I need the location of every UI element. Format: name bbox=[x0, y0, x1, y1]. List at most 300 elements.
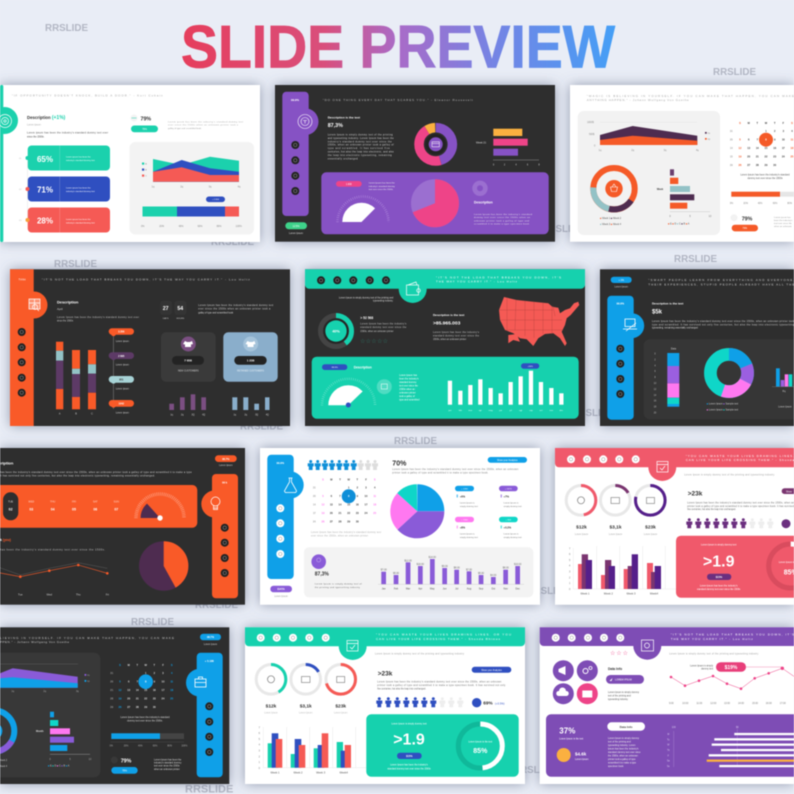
bar chart: Apr bbox=[418, 588, 422, 591]
calendar: 30 bbox=[153, 705, 156, 709]
body text: and typesetting industry. Lorem Ipsum has been the bbox=[328, 137, 394, 140]
stat: 23k: Show your Analytics bbox=[481, 669, 503, 672]
calendar: 9 bbox=[357, 494, 359, 498]
callouts: simply dummy text bbox=[460, 505, 478, 508]
line chart: Fri bbox=[106, 592, 109, 596]
line chart: Thu bbox=[76, 592, 81, 596]
days: 05 bbox=[72, 508, 76, 512]
calendar: 30 bbox=[356, 520, 359, 524]
timeline dots: 02 bbox=[19, 189, 22, 191]
horizontal bar chart: W bbox=[667, 745, 670, 747]
calendar caption: Lorem Ipsum has been the industry's standard bbox=[120, 716, 170, 719]
calendar: F bbox=[783, 121, 785, 125]
calendar: 22 bbox=[765, 154, 768, 158]
calendar: 14 bbox=[136, 688, 139, 692]
calendar: 2 bbox=[154, 671, 156, 675]
calendar: 27 bbox=[747, 163, 751, 167]
calendar: 28 bbox=[756, 163, 759, 167]
79% stat: when an unknown bbox=[774, 226, 792, 228]
body text: essentially unchanged bbox=[328, 157, 358, 160]
calendar: 27 bbox=[330, 520, 333, 524]
stat: 85.965.003: standard dummy text ever since the bbox=[433, 334, 480, 338]
pill: 98.7% bbox=[222, 458, 230, 461]
calendar: 23 bbox=[356, 511, 359, 515]
progress bar: 80% bbox=[787, 203, 792, 205]
sidebar: 99.9% bbox=[291, 98, 299, 102]
sidebar bbox=[282, 92, 318, 216]
calendar: M bbox=[748, 121, 750, 125]
stat: 69% bbox=[472, 698, 505, 707]
slide 5: dark with teal bbox=[305, 269, 585, 426]
panel: teal stat bbox=[366, 714, 519, 777]
horizontal bar chart bbox=[657, 169, 712, 225]
watermarks: RRSLIDE bbox=[195, 600, 238, 611]
stacked bar: 6 bbox=[654, 371, 656, 373]
slide 9: white with coral bbox=[555, 448, 794, 605]
panel: charts bbox=[130, 142, 254, 234]
calendar: 20 bbox=[747, 154, 751, 158]
horizontal bars: ■ E ■ D ■ C ■ B ■ A bbox=[48, 764, 70, 768]
area chart: 3q bbox=[664, 149, 667, 152]
timeline pills: Lorem ipsum bbox=[116, 387, 129, 390]
pill: + 2.560 bbox=[212, 199, 220, 201]
slide 3: white with orange bbox=[570, 85, 794, 242]
bar chart: jun bbox=[498, 410, 503, 412]
progress bar: 0% bbox=[110, 746, 113, 748]
stacked bar: 2 bbox=[654, 359, 656, 361]
pill bbox=[215, 455, 237, 467]
calendar: 17 bbox=[313, 511, 316, 515]
stat: 85.965.003 bbox=[433, 313, 480, 341]
ring stats: $12k bbox=[576, 524, 587, 530]
days and hours: HOURS bbox=[176, 318, 185, 320]
grouped bar chart: 3 bbox=[259, 750, 261, 752]
bar chart: $10.00 bbox=[514, 563, 522, 566]
stacked bar bbox=[141, 206, 243, 228]
intro text: Lorem Ipsum is simply dummy text of the printing and typesetting industry bbox=[375, 652, 465, 656]
ring stats: Lorem Ipsum bbox=[609, 533, 622, 536]
pill bbox=[200, 634, 221, 646]
stacked bar: 0 bbox=[654, 354, 656, 356]
ring: 85% bbox=[769, 544, 794, 588]
green pill: 12.5% bbox=[293, 225, 300, 228]
grouped bar chart bbox=[259, 726, 386, 774]
heading 70% bbox=[392, 460, 519, 474]
description: Lorem Ipsum has been the industry's standard dummy text ever bbox=[57, 316, 139, 319]
grouped bar chart: 1 bbox=[569, 582, 571, 585]
donut legend: ■ Week 1 ■ Week 2 bbox=[600, 217, 622, 220]
calendar: T bbox=[339, 478, 341, 482]
stacked bar: 0% bbox=[141, 225, 145, 228]
quote bbox=[376, 633, 511, 641]
sidebar bbox=[267, 455, 304, 579]
callouts: Lorem Ipsum is bbox=[504, 502, 519, 504]
calendar: 26 bbox=[119, 705, 122, 709]
stat: 52 568: Lorem Ipsum has been the industry's bbox=[360, 322, 407, 326]
stat: 23k: five centuries, but also the leap into unchanged. bbox=[687, 508, 736, 511]
body text: industry's standard dummy text ever since the bbox=[328, 140, 392, 143]
body text: type and scrambled. It has survived five bbox=[328, 147, 390, 150]
area chart: 2q bbox=[43, 690, 47, 693]
big number: Lorem Ipsum has been the industry's bbox=[700, 584, 738, 588]
stat: 85.965.003: 1500s, when an unknown printer bbox=[433, 338, 466, 341]
heading: Description is the text bbox=[328, 116, 360, 120]
stat: 23k: Show bbox=[786, 491, 792, 493]
legend: T1 bbox=[708, 133, 711, 135]
pill: top bar: +50% bbox=[528, 366, 533, 368]
calendar bbox=[730, 121, 794, 167]
grouped bar chart: 2 bbox=[259, 755, 261, 758]
icon: report bbox=[29, 299, 40, 311]
bar chart: $7.00 bbox=[381, 569, 387, 572]
icon: laptop bbox=[623, 319, 637, 331]
calendar: 6 bbox=[128, 680, 130, 684]
calendar: 14 bbox=[313, 502, 316, 506]
bar chart: $4.00 bbox=[490, 574, 497, 577]
79% stat: Lorem ipsum has bbox=[774, 216, 792, 219]
calendar caption: dummy text ever since the 1500s bbox=[747, 177, 783, 180]
small bars: Rq bbox=[783, 391, 786, 393]
sidebar: 99 k bbox=[222, 480, 228, 484]
card: 65%: industry's standard dummy text bbox=[66, 159, 95, 162]
big number: >1.9 bbox=[393, 732, 425, 748]
days: FRI bbox=[72, 500, 76, 504]
calendar: 21 bbox=[110, 688, 114, 692]
progress bar: 80% bbox=[167, 746, 172, 748]
panel: revenue bars bbox=[304, 547, 533, 597]
bar chart: Aug bbox=[467, 588, 472, 591]
line chart: 11:00 bbox=[696, 702, 703, 705]
pill and heading: Description bbox=[354, 366, 372, 370]
callouts: Lorem Ipsum is bbox=[460, 502, 476, 504]
description: Description is the text bbox=[652, 302, 683, 306]
calendar: 8 bbox=[145, 680, 147, 684]
card: 71%: 71% bbox=[37, 186, 53, 194]
big number: Lorem Ipsum has been the industry's bbox=[390, 764, 429, 767]
header bbox=[245, 627, 525, 660]
bar chart: 2 bbox=[504, 164, 506, 166]
bar chart: 4 bbox=[515, 164, 517, 166]
horizontal bar chart: M bbox=[667, 734, 669, 736]
text block: text ever since the bbox=[399, 384, 419, 388]
subheading: k (you) bbox=[0, 538, 11, 542]
line chart: 14:00 bbox=[738, 702, 745, 705]
heading bbox=[328, 116, 360, 129]
calendar: 22 bbox=[347, 511, 351, 515]
description text: Lorem ipsum bbox=[27, 124, 41, 126]
quote bbox=[436, 276, 561, 284]
horizontal bars bbox=[36, 712, 92, 768]
bar chart: May bbox=[430, 588, 435, 591]
description: Description bbox=[474, 200, 493, 204]
calendar: 31 bbox=[730, 129, 733, 133]
pie chart bbox=[404, 498, 431, 525]
bar chart: Dec bbox=[515, 588, 521, 591]
pill: show analytics: Show your Analytics bbox=[497, 459, 518, 462]
heading 70%: Lorem Ipsum has been the industry's standard dummy text ever since the 1500s, when an unknown bbox=[392, 468, 519, 471]
stacked bar: 100% bbox=[236, 225, 243, 228]
gauge bbox=[322, 379, 375, 415]
text block: 1500s when an bbox=[399, 389, 416, 391]
area chart: 0 bbox=[594, 144, 596, 148]
legend bbox=[84, 674, 90, 683]
calendar: 28 bbox=[339, 520, 342, 524]
79% stat: 79% bbox=[140, 117, 151, 123]
big number: Lorem Ipsum is simply dummy text bbox=[391, 722, 427, 726]
intro text: Lorem Ipsum is simply dummy text of the printing and typesetting industry bbox=[669, 652, 759, 656]
ring: 85%: 85% bbox=[473, 748, 488, 755]
panel: coral stat bbox=[676, 536, 794, 598]
area chart bbox=[152, 157, 241, 189]
text block bbox=[399, 374, 420, 402]
small bars: blue: 1q bbox=[234, 414, 237, 416]
intro text bbox=[339, 296, 394, 303]
watermarks: RRSLIDE bbox=[713, 67, 756, 78]
stat: Lorem Ipsum is simply dummy text of bbox=[315, 582, 362, 586]
calendar: 1 bbox=[765, 129, 767, 133]
bar chart: feb bbox=[459, 410, 463, 412]
card: new customers: NEW CUSTOMERS bbox=[178, 370, 199, 372]
grouped bar chart: Week 1 bbox=[270, 770, 280, 774]
sidebar bbox=[201, 474, 238, 598]
grouped bar chart: 0 bbox=[259, 767, 261, 770]
card: retained customers: 1 238 bbox=[247, 359, 255, 363]
small bars: blue: 3Q bbox=[255, 414, 258, 416]
panel: charts bbox=[0, 653, 100, 777]
panel: date strip bbox=[0, 485, 197, 528]
progress bar: 20% bbox=[124, 746, 128, 748]
calendar: 8 bbox=[348, 494, 350, 498]
card: 71%: industry's standard dummy text bbox=[66, 190, 95, 193]
bar chart: Oct bbox=[491, 588, 496, 591]
body text: It has survived not only five centuries, but also the leap into electronic typesetting, remaining essentially unchanged. bbox=[0, 475, 155, 478]
calendar: 1 bbox=[348, 486, 350, 490]
calendar: 17 bbox=[365, 502, 368, 506]
watermarks: RRSLIDE bbox=[674, 254, 717, 265]
description: April bbox=[57, 307, 63, 311]
calendar: 20 bbox=[730, 138, 733, 142]
watermarks: RRSLIDE bbox=[131, 617, 174, 628]
data info: LOREM IPSUM bbox=[615, 678, 632, 681]
callouts bbox=[455, 486, 522, 539]
stat: 23k bbox=[687, 488, 794, 511]
area chart: 1q bbox=[152, 186, 155, 189]
callouts: +6% bbox=[460, 494, 466, 498]
small bars: purple bbox=[169, 394, 206, 416]
header bbox=[555, 448, 794, 481]
calendar: W bbox=[347, 478, 350, 482]
pill: show analytics bbox=[488, 457, 527, 463]
grouped bar chart: 3 bbox=[569, 570, 571, 574]
slide 1: white with teal, blue and red cards bbox=[0, 85, 260, 242]
text block: typesetting industry. Lorem bbox=[608, 744, 635, 747]
watermarks: RRSLIDE bbox=[513, 765, 556, 776]
grouped bar chart: 5 bbox=[569, 559, 571, 562]
pill: Lorem Ipsum bbox=[614, 286, 628, 288]
calendar: S bbox=[322, 478, 324, 482]
horizontal bars: Month bbox=[36, 730, 44, 733]
grouped bar chart: Week 2 bbox=[293, 770, 303, 774]
ring stats: Lorem Ipsum bbox=[644, 533, 657, 536]
calendar: 24 bbox=[162, 696, 165, 700]
subheading: has been the industry's standard dummy text ever since the 1500s. bbox=[0, 548, 105, 552]
calendar: 1 bbox=[145, 671, 147, 675]
calendar: 15 bbox=[765, 146, 768, 150]
bar chart: mar bbox=[468, 409, 472, 412]
calendar: 20 bbox=[313, 494, 316, 498]
days and hours: 54 bbox=[177, 306, 183, 312]
callouts: +7% bbox=[504, 494, 510, 498]
watermarks: RRSLIDE bbox=[394, 436, 437, 447]
timeline dots: 03 bbox=[19, 220, 22, 222]
text block: Ipsum has been the industry's bbox=[608, 748, 639, 750]
text block: ever since the 1500s when an unknown printer took a bbox=[198, 308, 271, 311]
calendar: F bbox=[365, 478, 367, 482]
stat: 23k: printer took a galley of type and scrambled it to make a type specimen book. It has survived not only bbox=[377, 684, 506, 687]
legend: T2 bbox=[87, 681, 90, 683]
slide 4: dark with orange bbox=[10, 269, 290, 426]
watermarks: RRSLIDE bbox=[526, 586, 570, 597]
calendar: 17 bbox=[782, 146, 785, 150]
stat: 85.965.003: >85.965.003 bbox=[433, 320, 461, 326]
big number: $15% bbox=[716, 576, 723, 579]
calendar: 14 bbox=[730, 146, 733, 150]
sidebar: 99.9% bbox=[616, 302, 625, 306]
stat: 69%: 69% bbox=[483, 700, 494, 706]
ring chart: 40% bbox=[320, 316, 352, 346]
line chart: 10:00 bbox=[682, 702, 689, 705]
79% stat: text ever since the bbox=[774, 222, 793, 225]
stacked bar: 8 bbox=[654, 377, 656, 379]
watermarks: RRSLIDE bbox=[541, 224, 585, 235]
big number bbox=[387, 722, 431, 770]
stat: 69%: (+3.3%) bbox=[495, 702, 505, 706]
ring stats: $3,1k bbox=[300, 704, 312, 710]
calendar: 13 bbox=[330, 502, 333, 506]
bar chart: apr bbox=[479, 409, 482, 412]
progress bar bbox=[730, 192, 794, 205]
text block: type and scrambled bbox=[399, 398, 420, 402]
grouped bar chart: Week 1 bbox=[580, 592, 590, 596]
donut legend bbox=[0, 759, 8, 768]
bar chart: Jan bbox=[382, 588, 386, 591]
horizontal bar chart bbox=[667, 726, 794, 768]
data info: Lorem Ipsum is simply dummy bbox=[608, 691, 640, 694]
pill: top bar bbox=[521, 363, 539, 369]
description: since the 1500s bbox=[57, 320, 74, 323]
slide 7: dark with orange, calendar strip bbox=[0, 448, 245, 605]
slide 12: white with purple bbox=[540, 627, 794, 784]
stacked bars bbox=[56, 342, 96, 416]
timeline pills: 951 bbox=[119, 378, 124, 382]
calendar: 18 bbox=[373, 502, 377, 506]
bar chart: 8 bbox=[538, 164, 540, 166]
line chart: Wed bbox=[47, 592, 53, 596]
card: new customers bbox=[161, 332, 216, 382]
bar chart: $9.00 bbox=[442, 565, 448, 568]
calendar: 18 bbox=[791, 146, 794, 150]
donut chart bbox=[710, 354, 748, 392]
donut chart bbox=[0, 710, 14, 752]
calendar caption: Lorem Ipsum has been the industry's standard dummy text bbox=[311, 531, 381, 534]
calendar: 14 bbox=[339, 502, 342, 506]
calendar: 12 bbox=[119, 688, 122, 692]
green pill: Lorem Ipsum bbox=[289, 232, 303, 235]
calendar: 31 bbox=[110, 671, 114, 675]
stats: Lorem Ipsum bbox=[575, 758, 588, 761]
description: typesetting, remaining essentially unchanged bbox=[652, 327, 699, 330]
calendar: 30 bbox=[773, 163, 777, 167]
calendar: 31 bbox=[313, 486, 316, 490]
small bars: blue bbox=[232, 397, 270, 416]
horizontal bars: 0 bbox=[49, 758, 51, 761]
small bars: purple: 4Q bbox=[202, 414, 205, 416]
watermarks: RRSLIDE bbox=[571, 408, 615, 419]
79% stat: galley of type and scrambled book bbox=[168, 127, 202, 130]
horizontal bar chart: F bbox=[668, 755, 670, 757]
pill bbox=[611, 277, 632, 288]
sidebar: TVVH bbox=[19, 277, 26, 281]
stacked bar: 4 bbox=[654, 365, 656, 367]
bar chart: Week 21 bbox=[476, 140, 487, 144]
ring stats: Lorem Ipsum bbox=[575, 533, 588, 536]
icon: bulb bbox=[211, 497, 220, 510]
bar chart: jul bbox=[509, 410, 512, 412]
text block bbox=[608, 737, 641, 768]
area chart bbox=[0, 664, 79, 693]
calendar: 15 bbox=[144, 688, 148, 692]
horizontal bars: 5 bbox=[69, 758, 71, 761]
timeline pills: 3.356 bbox=[118, 331, 125, 334]
calendar: 9 bbox=[774, 138, 776, 142]
legend: B bbox=[145, 170, 147, 172]
data pill: Lorem Ipsum bbox=[274, 595, 288, 598]
calendar: M bbox=[128, 663, 130, 667]
bar chart: Nov bbox=[503, 588, 509, 591]
stat: 23k: printer took a galley of type and scrambled it to make a type specimen book. It has survived bbox=[687, 505, 794, 508]
bar chart: dec bbox=[560, 410, 564, 412]
watermarks: RRSLIDE bbox=[211, 237, 254, 248]
stat: 23k bbox=[377, 667, 511, 690]
description bbox=[652, 302, 794, 330]
stacked bars: C bbox=[91, 412, 93, 416]
big number bbox=[697, 544, 741, 591]
text block: specimen book bbox=[608, 766, 624, 768]
bar chart: Jul bbox=[455, 588, 459, 591]
grouped bar chart: Week 3 bbox=[626, 592, 636, 596]
calendar: S bbox=[739, 121, 741, 125]
description heading: Description (+1%) bbox=[27, 115, 66, 121]
people row bbox=[308, 460, 378, 470]
days: SUN bbox=[114, 500, 119, 504]
bar chart: sep bbox=[529, 410, 534, 412]
progress bar: 40% bbox=[758, 203, 762, 205]
calendar: 25 bbox=[373, 511, 377, 515]
stats: $4.6k bbox=[575, 752, 587, 756]
stacked bar: 40% bbox=[179, 225, 184, 228]
pink pill and text: industry's standard dummy bbox=[369, 185, 396, 188]
donut legend: ■ Week 3 ■ Week 4 bbox=[600, 223, 622, 226]
calendar caption: dummy text ever since the 1500s. bbox=[127, 720, 163, 723]
grouped bar chart: Week 3 bbox=[316, 770, 326, 774]
bar chart: nov bbox=[550, 410, 554, 412]
stacked bars: B bbox=[75, 412, 77, 416]
icon: badge bbox=[298, 114, 312, 128]
calendar: 16 bbox=[153, 688, 156, 692]
calendar: 10 bbox=[782, 138, 785, 142]
heading 70%: 70% bbox=[392, 460, 407, 468]
body text: centuries, but also the leap into electronic, and also bbox=[328, 150, 394, 154]
